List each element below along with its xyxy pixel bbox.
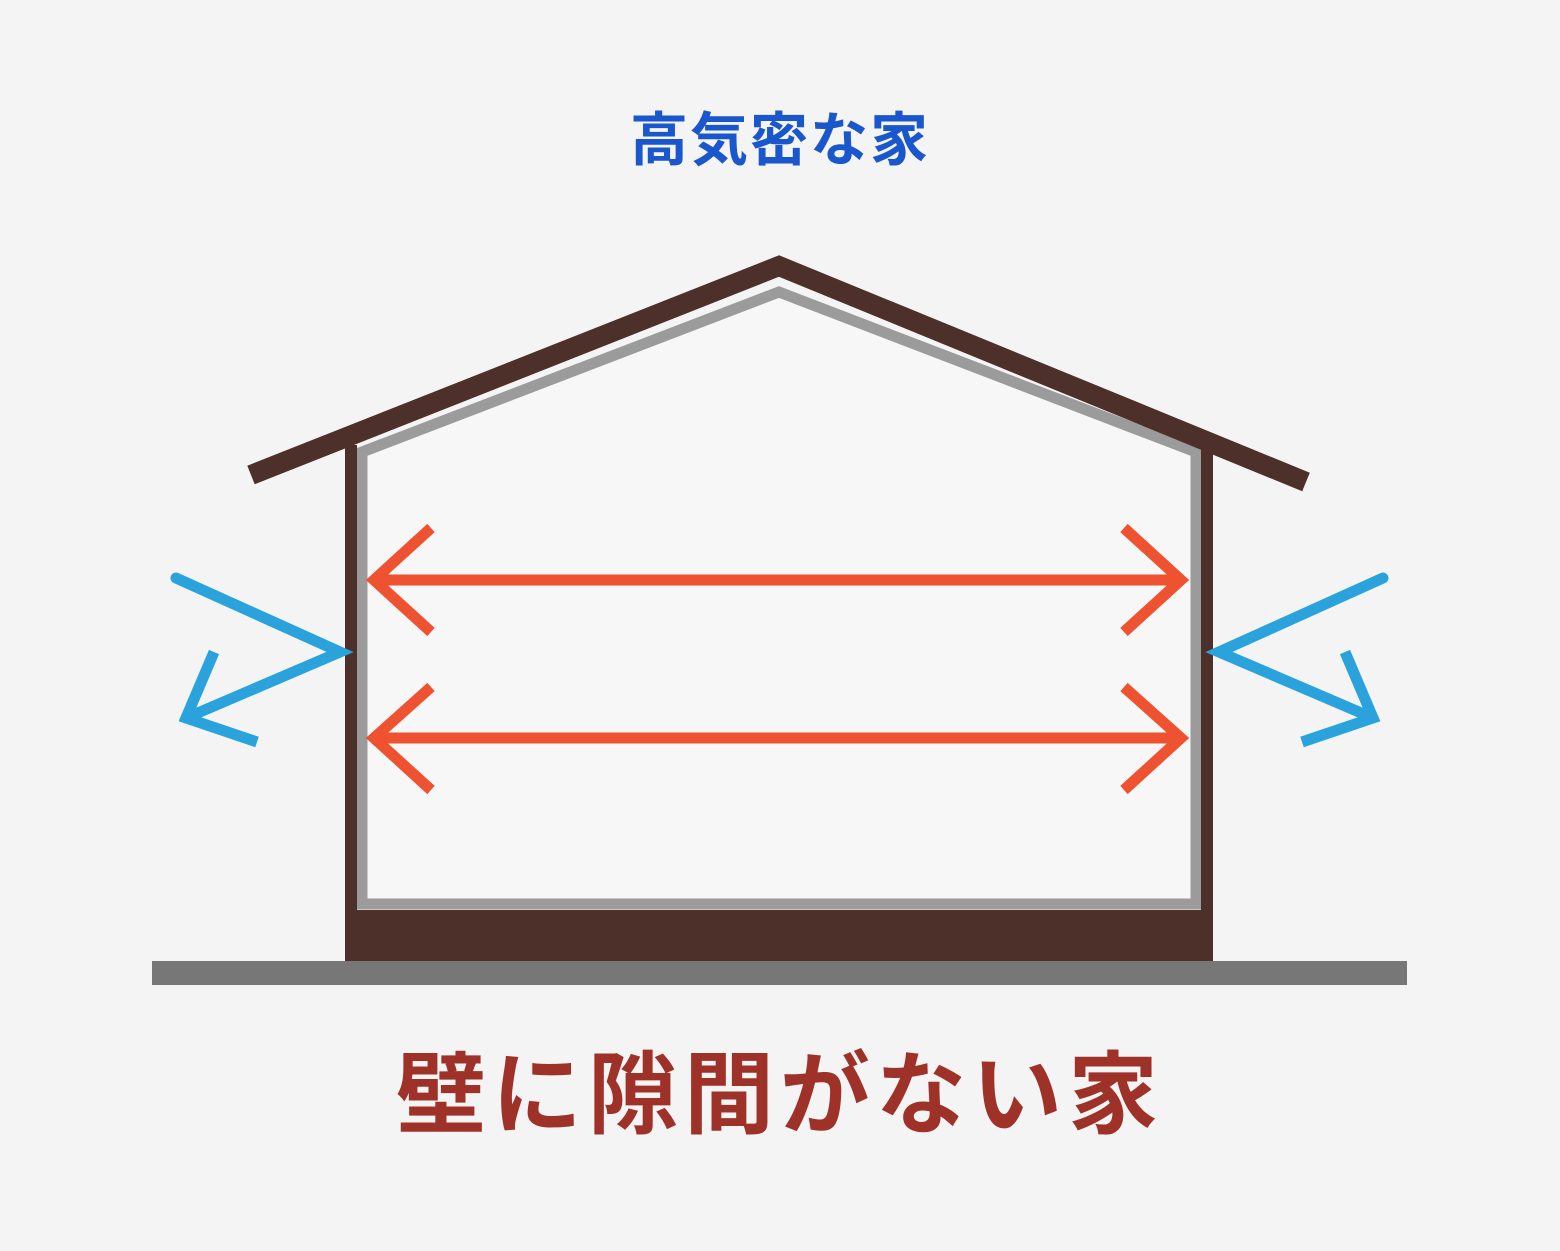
arrow: red upper double arrow (374, 528, 1181, 632)
ground (152, 961, 1407, 985)
arrow: blue left bounce (176, 578, 340, 742)
arrow: blue right bounce (1219, 578, 1383, 742)
caption: 壁に隙間がない家 (396, 1046, 1164, 1146)
left wall (345, 445, 357, 961)
inner gray insulation layer (357, 292, 1196, 904)
floor foundation (345, 910, 1213, 961)
roof (251, 266, 1306, 482)
right wall (1201, 445, 1213, 961)
arrow: red lower double arrow (374, 687, 1181, 790)
house (251, 266, 1306, 961)
house interior (362, 292, 1196, 904)
title: 高気密な家 (630, 108, 930, 173)
